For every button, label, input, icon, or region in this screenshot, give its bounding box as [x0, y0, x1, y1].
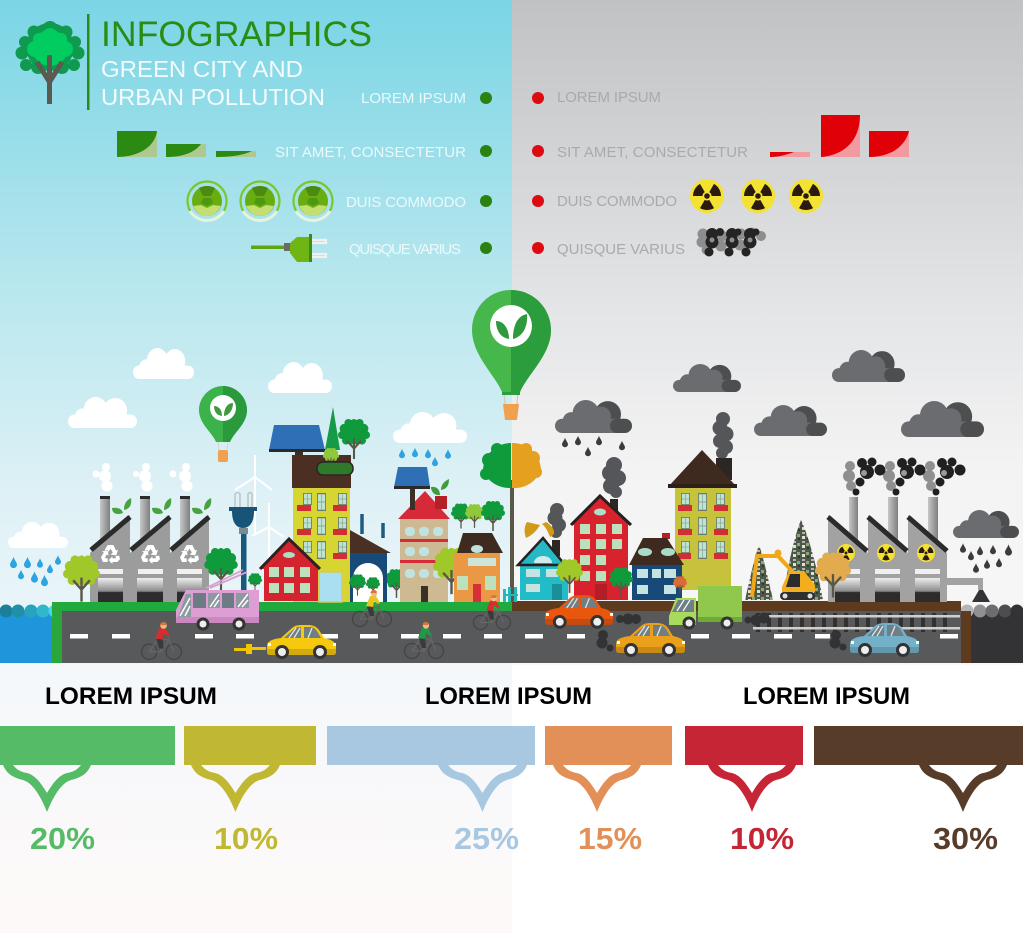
half green half orange tree	[480, 443, 542, 602]
lime street tree	[433, 548, 470, 594]
beige townhouse with solar roof	[394, 467, 450, 602]
exhaust smoke	[596, 612, 846, 652]
subtitle line 2: URBAN POLLUTION	[101, 84, 325, 110]
water: polluted	[960, 604, 1023, 663]
orange house	[454, 533, 503, 602]
polluting factory	[828, 458, 983, 602]
bicycles and riders	[142, 590, 510, 659]
blue house with brown roof	[629, 533, 684, 600]
orange tree in front of factory	[815, 552, 851, 598]
chart: green declining bars	[117, 131, 256, 157]
solar panel	[269, 425, 325, 464]
chimney smoke	[548, 503, 566, 538]
stat: orange 15%: 15%	[578, 821, 642, 856]
electric yellow car with plug	[234, 625, 336, 659]
legend: green side labels	[275, 90, 492, 258]
stat: orange 15%	[545, 726, 672, 856]
stat: brown 30%	[814, 726, 1023, 856]
street trees polluted side	[556, 559, 687, 598]
white clouds	[8, 348, 467, 548]
icons: radiation hazard signs	[690, 179, 823, 213]
green delivery truck	[669, 586, 742, 630]
label: LOREM IPSUM	[557, 89, 661, 106]
water: clean	[0, 604, 62, 663]
railway track	[753, 613, 960, 632]
yellow polluted apartment building	[668, 412, 737, 590]
teal fence	[503, 587, 518, 602]
orange polluting cars	[545, 595, 685, 657]
title text: INFOGRAPHICS	[101, 15, 372, 54]
label: QUISQUE VARIUS	[349, 241, 461, 258]
heading 3: LOREM IPSUM	[743, 683, 910, 710]
clean rain drops	[10, 448, 451, 586]
label: SIT AMET, CONSECTETUR	[557, 144, 748, 161]
stat: red 10%: 10%	[730, 821, 794, 856]
icon: green electric plug	[251, 234, 326, 262]
electric plug tower	[229, 492, 257, 595]
solar yellow apartment building	[269, 407, 370, 602]
acid rain drops	[562, 436, 1012, 573]
stat: green 20%: 20%	[30, 821, 95, 856]
label: QUISQUE VARIUS	[557, 241, 685, 258]
pink electric bus	[176, 570, 259, 630]
teal house	[518, 503, 568, 600]
section headings	[45, 683, 910, 710]
blue arch house	[349, 514, 391, 602]
stat: blue 25%	[327, 726, 535, 856]
black smoke	[843, 458, 966, 496]
heading 2: LOREM IPSUM	[425, 683, 592, 710]
blue car	[850, 623, 919, 657]
yellow excavator	[752, 550, 815, 600]
header: title block	[16, 14, 372, 110]
stat: red 10%	[685, 726, 803, 856]
stat: blue 25%: 25%	[454, 821, 519, 856]
chart: red rising bars	[770, 115, 909, 157]
grey pollution clouds	[555, 350, 1019, 538]
green factory	[90, 463, 211, 602]
garbage piles	[745, 520, 823, 600]
label: DUIS COMMODO	[557, 193, 677, 210]
large green balloon	[472, 290, 551, 420]
icons: green power rings	[188, 182, 332, 220]
stat: brown 30%: 30%	[933, 821, 998, 856]
wind turbines	[235, 455, 284, 560]
label: LOREM IPSUM	[361, 90, 466, 107]
subtitle line 1: GREEN CITY AND	[101, 56, 303, 82]
roof garden	[317, 407, 370, 475]
yellow facade	[293, 488, 350, 602]
small green balloon	[199, 386, 247, 462]
waste pipe	[947, 578, 983, 590]
red house	[260, 539, 320, 601]
decorative title rule	[87, 14, 90, 110]
red bullets	[532, 92, 544, 254]
white steam	[92, 463, 192, 492]
stat: olive 10%: 10%	[214, 821, 278, 856]
icon: green tree logo	[16, 21, 84, 104]
legend: pollution side labels	[532, 89, 748, 258]
icon: black smoke clouds	[696, 228, 766, 256]
green trees	[63, 501, 505, 602]
green bullets	[480, 92, 492, 254]
stat: green 20%	[0, 726, 175, 856]
label: SIT AMET, CONSECTETUR	[275, 144, 466, 161]
road and ground	[0, 601, 1023, 663]
stat: olive 10%	[184, 726, 316, 856]
heading 1: LOREM IPSUM	[45, 683, 217, 710]
red house with smoking chimney	[571, 457, 631, 600]
label: DUIS COMMODO	[346, 194, 466, 211]
